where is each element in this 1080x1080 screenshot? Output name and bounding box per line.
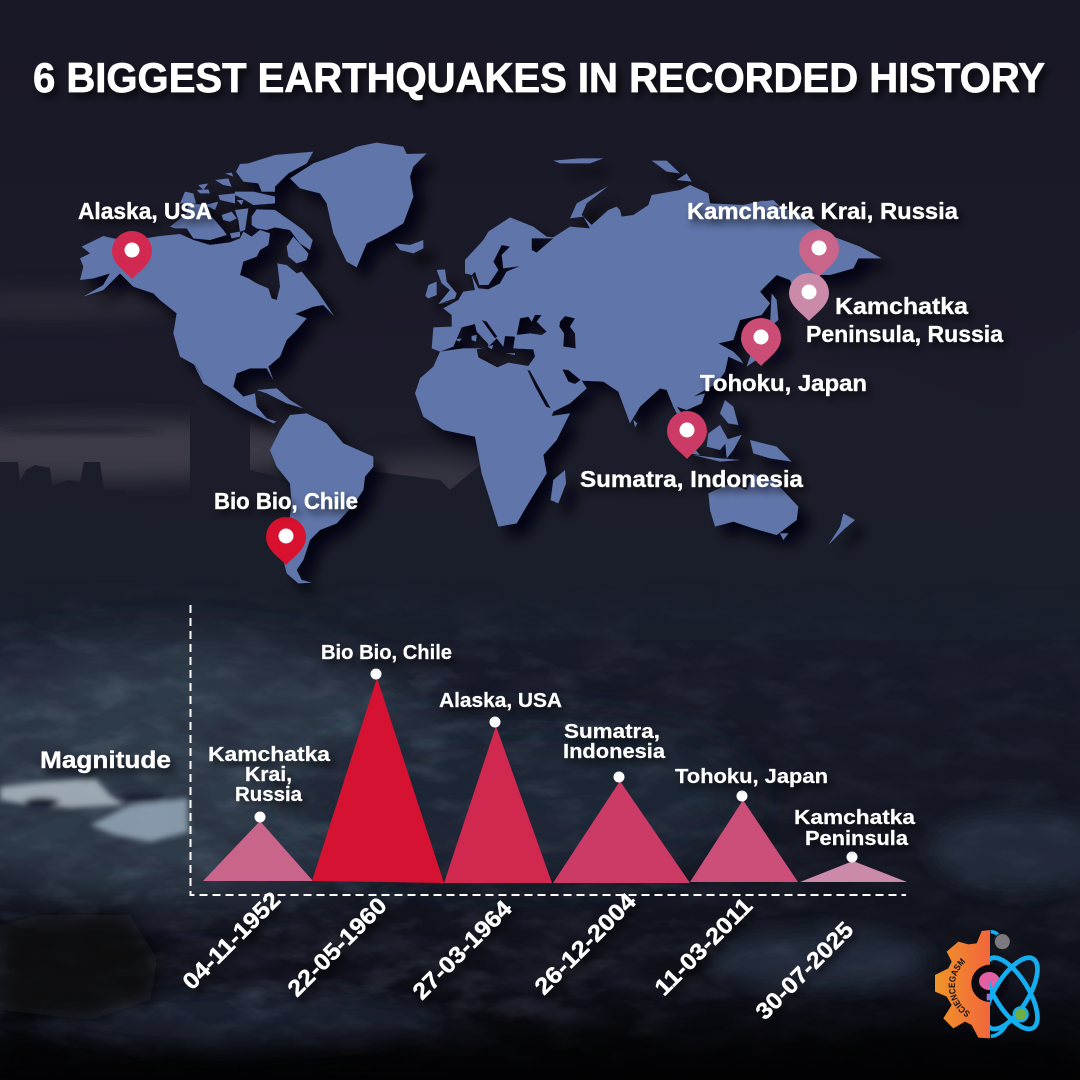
date: 04-11-1952: 04-11-1952 <box>177 886 285 995</box>
date: 30-07-2025: 30-07-2025 <box>750 916 858 1025</box>
peak: 27-03-1964 Alaska <box>444 716 552 883</box>
label: Kamchatka Krai, Russia: Kamchatka Krai, Russia <box>687 198 958 224</box>
Cuba <box>257 388 303 408</box>
Canadian Arctic islands <box>170 152 313 263</box>
dark rock foreground <box>0 915 158 1020</box>
date: 26-12-2004: 26-12-2004 <box>529 888 641 1000</box>
peak: 04-11-1952 Kamchatka Krai <box>203 812 313 881</box>
logo earth <box>1014 1007 1028 1021</box>
islands of the Eastern Hemisphere <box>425 158 855 545</box>
label: Kamchatka Peninsula: Kamchatka <box>794 806 916 829</box>
South America <box>270 413 373 583</box>
date: 27-03-1964: 27-03-1964 <box>407 895 517 1005</box>
Afro-Eurasia <box>415 185 882 527</box>
logo brain badge <box>971 965 1009 1002</box>
label: Bio Bio, Chile: Bio Bio, Chile <box>214 488 358 514</box>
logo moon <box>994 934 1010 950</box>
label: Bio Bio, Chile: Bio Bio, Chile <box>321 641 452 664</box>
peak labels <box>208 641 916 850</box>
skyline silhouette <box>0 330 1080 600</box>
pin: Tohoku, Japan <box>741 318 781 366</box>
North America <box>80 230 334 423</box>
map: the Americas and Arctic <box>80 143 427 583</box>
world map <box>80 143 882 583</box>
puddle <box>0 778 188 842</box>
Greenland <box>290 143 427 267</box>
label: Sumatra, Indonesia: Indonesia <box>563 740 666 763</box>
pin: Kamchatka Peninsula, Russia <box>789 273 829 321</box>
label: Sumatra, Indonesia: Sumatra, Indonesia <box>580 466 803 492</box>
pin: Bio Bio, Chile <box>266 517 306 565</box>
label: Kamchatka Krai, Russia: Krai, <box>245 763 292 786</box>
peak: 30-07-2025 Kamchatka Peninsula <box>800 852 907 882</box>
peak: 22-05-1960 Bio Bio <box>312 668 444 883</box>
rubble ground tones <box>0 640 460 900</box>
chart: magnitude by date <box>40 605 916 1025</box>
label: Alaska, USA: Alaska, USA <box>78 198 212 224</box>
logo wordmark: SCIENCEGASM <box>948 958 970 1017</box>
peak: 26-12-2004 Sumatra <box>553 772 690 883</box>
label: Kamchatka Peninsula: Peninsula <box>805 827 909 850</box>
label: Alaska, USA: Alaska, USA <box>439 689 562 712</box>
label: Sumatra, Indonesia: Sumatra, <box>564 720 660 743</box>
label: Kamchatka Krai, Russia: Russia <box>235 783 303 806</box>
logo atom orbits <box>990 930 1040 1038</box>
date: 11-03-2011: 11-03-2011 <box>649 892 757 1001</box>
label: Kamchatka Peninsula, Russia: Peninsula, Russia <box>806 321 1003 347</box>
map labels <box>78 198 1003 514</box>
date: 22-05-1960: 22-05-1960 <box>282 892 392 1002</box>
logo gear half <box>935 930 990 1038</box>
label: Kamchatka Peninsula, Russia: Kamchatka <box>835 293 968 319</box>
label: Tohoku, Japan: Tohoku, Japan <box>700 370 867 396</box>
pin: Kamchatka Krai, Russia <box>799 229 839 277</box>
map: Eurasia, Africa and Oceania <box>415 158 882 545</box>
storm clouds <box>0 291 495 504</box>
label: Tohoku, Japan: Tohoku, Japan <box>675 765 828 788</box>
logo: Sciencegasm <box>935 930 1040 1038</box>
peak: 11-03-2011 Tohoku <box>690 790 798 882</box>
y axis label: Magnitude <box>40 747 171 774</box>
date labels <box>177 886 858 1025</box>
dashed axes <box>190 605 906 895</box>
label: Kamchatka Krai, Russia: Kamchatka <box>208 743 331 766</box>
pin: Sumatra, Indonesia <box>667 411 707 459</box>
pin: Alaska, USA <box>112 231 152 279</box>
Iceland <box>395 240 423 253</box>
title: 6 BIGGEST EARTHQUAKES IN RECORDED HISTORY <box>33 54 1045 101</box>
